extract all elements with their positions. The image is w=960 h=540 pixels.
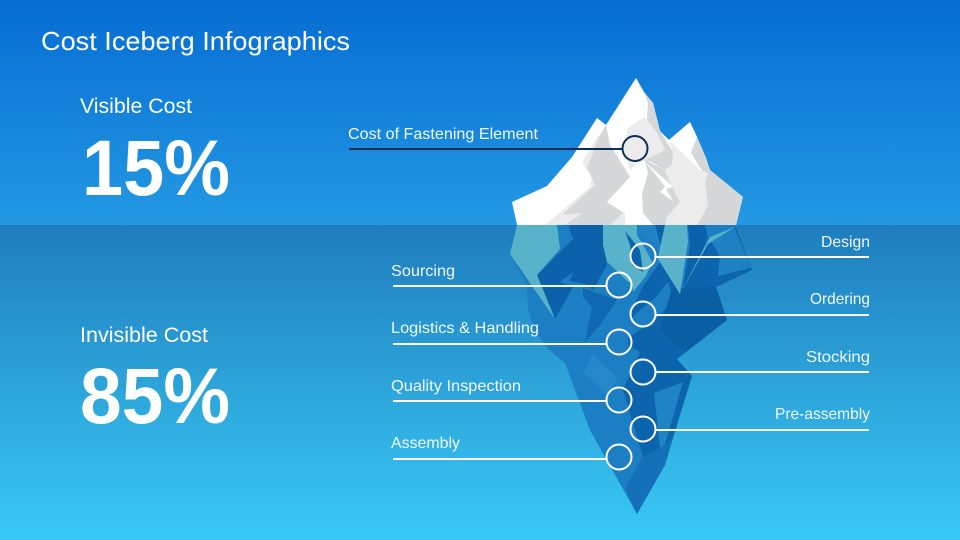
iceberg: tip above water (512, 78, 743, 225)
callout: Assembly (391, 435, 632, 470)
callout: Stocking: Stocking (806, 349, 870, 366)
panel: visible cost (80, 95, 230, 212)
callout: Design: Design (821, 234, 870, 251)
invisible cost value: 85% (80, 351, 230, 440)
callout: Cost of Fastening Element: Cost of Fastening Element (348, 126, 539, 143)
callout: Pre-assembly (630, 406, 870, 442)
callout: Stocking (630, 349, 870, 384)
callout: Ordering: Ordering (810, 291, 870, 308)
callout: Sourcing (391, 263, 632, 298)
visible cost value: 15% (82, 123, 230, 212)
callout: Quality Inspection: Quality Inspection (391, 378, 521, 395)
callout: Logistics & Handling (391, 320, 632, 354)
visible cost label: Visible Cost (80, 95, 192, 118)
iceberg: submerged part (510, 225, 752, 514)
callout: Sourcing: Sourcing (391, 263, 455, 280)
panel: invisible cost (80, 324, 230, 440)
callout: Quality Inspection (391, 378, 632, 412)
callout: Logistics & Handling: Logistics & Handling (391, 320, 539, 337)
invisible cost label: Invisible Cost (80, 324, 208, 347)
background: sky (0, 0, 960, 225)
background: sea (0, 225, 960, 540)
callout: Assembly: Assembly (391, 435, 460, 452)
callout: Cost of Fastening Element (348, 126, 648, 161)
iceberg illustration (510, 78, 752, 514)
callout: Pre-assembly: Pre-assembly (775, 406, 870, 423)
callout: Ordering (630, 291, 870, 326)
title: Cost Iceberg Infographics (41, 26, 350, 56)
callout: Design (630, 234, 870, 268)
